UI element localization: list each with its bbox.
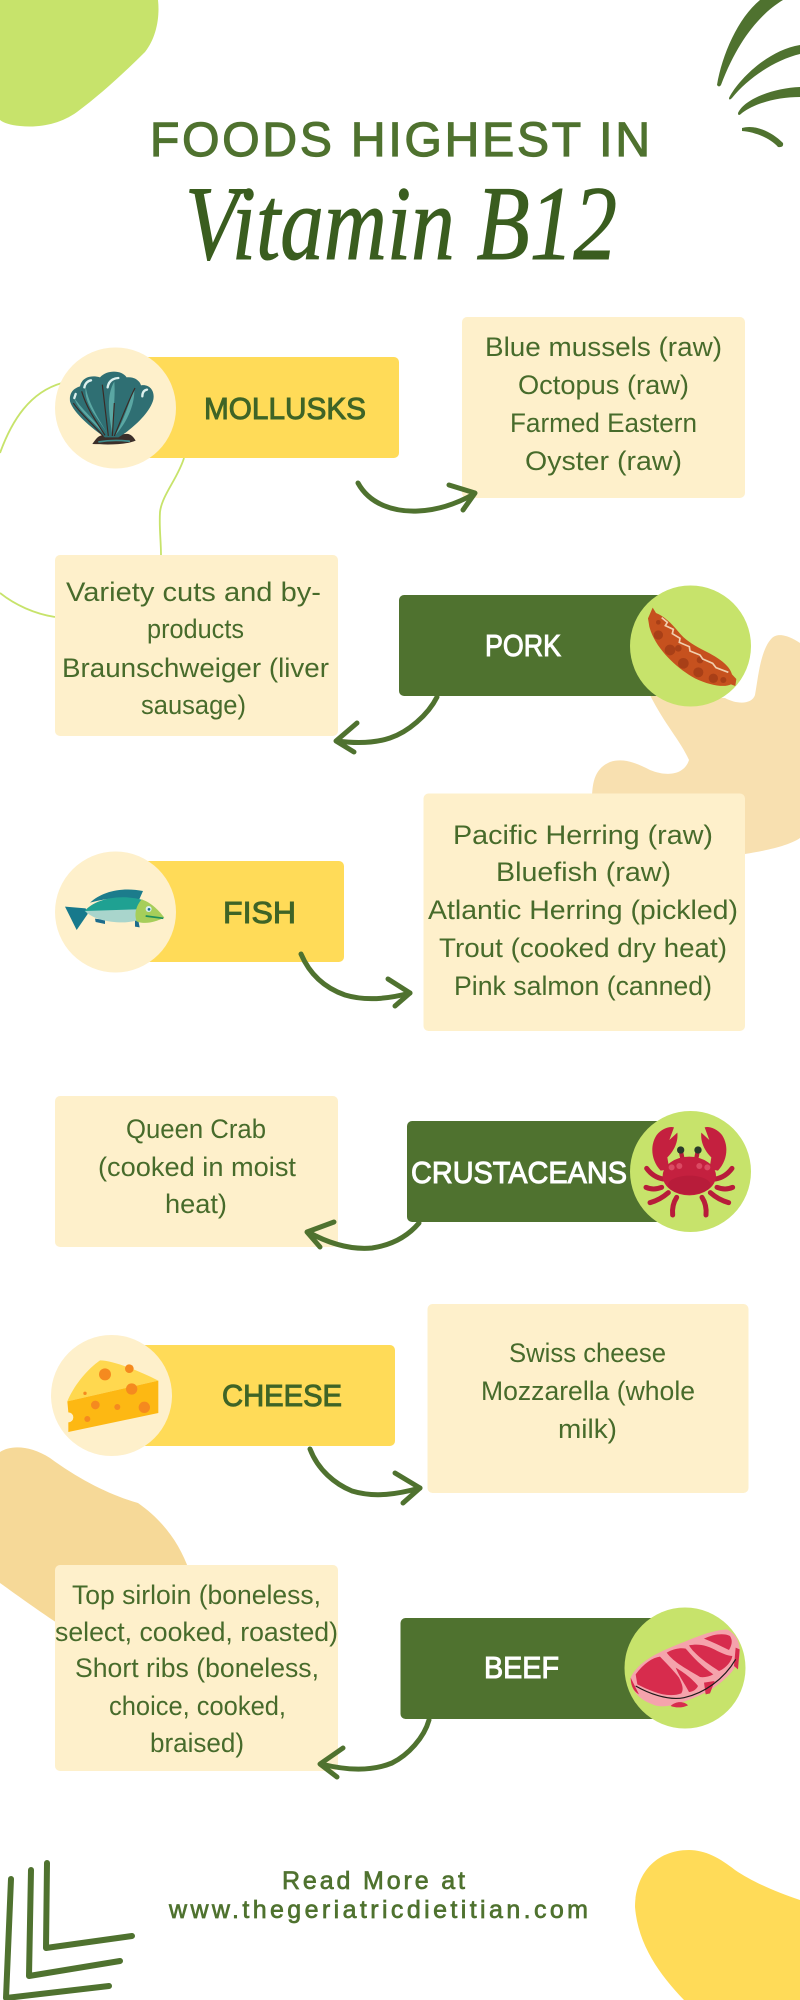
icon: shell — [70, 372, 154, 444]
panel: pork category — [399, 586, 751, 706]
panel: fish list: Atlantic Herring (pickled) — [428, 895, 738, 925]
cheese circle — [51, 1335, 172, 1456]
panel: fish list — [424, 794, 745, 1031]
icon: cheese — [67, 1360, 158, 1432]
cheese bar — [125, 1345, 395, 1446]
title line: foods highest in: FOODS HIGHEST IN — [150, 114, 650, 167]
panel: fish list: Trout (cooked dry heat) — [439, 933, 727, 963]
pork label: PORK — [485, 628, 561, 663]
arrow: pork to list — [336, 697, 437, 752]
decorative lines: bottom left — [6, 1863, 132, 1998]
footer text: Read More at — [282, 1867, 465, 1895]
beef label: BEEF — [484, 1650, 559, 1685]
panel: mollusks list: Blue mussels (raw) — [485, 332, 722, 362]
panel: pork list: Variety cuts and by- — [66, 577, 321, 607]
panel: beef list: choice, cooked, — [109, 1691, 286, 1721]
panel: fish list: Pink salmon (canned) — [454, 971, 712, 1001]
icon: crab — [646, 1127, 733, 1215]
mollusks label: MOLLUSKS — [204, 391, 366, 426]
panel: cheese list — [428, 1304, 748, 1493]
panel: fish list: Bluefish (raw) — [496, 857, 671, 887]
decorative blob: yellow bottom right — [635, 1850, 800, 2000]
title — [150, 114, 650, 282]
decorative blob: tan left — [0, 1447, 189, 1640]
decorative blob: tan right — [592, 635, 800, 860]
footer text: www.thegeriatricdietitian.com — [168, 1896, 588, 1924]
mollusks bar — [130, 357, 399, 458]
pork bar — [399, 595, 669, 696]
fish bar — [130, 861, 344, 962]
title line: vitamin b12: Vitamin B12 — [185, 165, 617, 282]
fish label: FISH — [223, 895, 296, 930]
panel: beef list: Short ribs (boneless, — [75, 1653, 319, 1683]
panel: crustaceans category — [407, 1111, 751, 1232]
panel: beef list: braised) — [150, 1728, 244, 1758]
panel: fish list: Pacific Herring (raw) — [453, 820, 713, 850]
panel: beef category — [400, 1608, 746, 1728]
panel: mollusks list: Octopus (raw) — [518, 370, 689, 400]
beef circle — [624, 1608, 746, 1728]
crustaceans bar — [407, 1121, 669, 1222]
panel: crustaceans list — [55, 1096, 338, 1247]
decorative blob: lime top left — [0, 0, 158, 126]
arrow: fish to list — [301, 954, 410, 1006]
icon: fish — [65, 889, 164, 930]
panel: pork list: products — [147, 614, 244, 644]
panel: beef list: Top sirloin (boneless, — [72, 1580, 321, 1610]
arrow: beef to list — [320, 1720, 429, 1777]
cheese label: CHEESE — [222, 1378, 342, 1413]
decorative leaves: top right — [717, 0, 800, 147]
arrow: crustaceans to list — [307, 1222, 419, 1248]
beef bar — [400, 1618, 664, 1719]
panel: crustaceans list: (cooked in moist — [98, 1152, 296, 1182]
arrow: cheese to list — [310, 1449, 420, 1503]
panel: cheese list: Mozzarella (whole — [481, 1376, 695, 1406]
panel: mollusks list — [462, 317, 745, 498]
pork circle — [630, 586, 751, 706]
panel: crustaceans list: Queen Crab — [126, 1114, 266, 1144]
panel: crustaceans list: heat) — [165, 1189, 227, 1219]
crustaceans label: CRUSTACEANS — [411, 1155, 627, 1190]
panel: mollusks list: Farmed Eastern — [510, 408, 697, 438]
panel: beef list — [55, 1565, 338, 1771]
crustaceans circle — [630, 1111, 751, 1232]
panel: cheese list: milk) — [558, 1414, 617, 1444]
panel: cheese category — [51, 1335, 395, 1456]
mollusks circle — [55, 348, 176, 468]
arrow: mollusks to list — [358, 483, 475, 511]
panel: fish category — [55, 852, 344, 972]
panel: pork list — [55, 555, 338, 736]
decorative thin lines — [0, 383, 184, 617]
icon: sausage — [648, 608, 736, 686]
icon: steak — [631, 1629, 740, 1707]
panel: mollusks list: Oyster (raw) — [525, 446, 682, 476]
panel: mollusks category — [55, 348, 399, 468]
fish circle — [55, 852, 176, 972]
panel: pork list: sausage) — [141, 690, 246, 720]
panel: beef list: select, cooked, roasted) — [55, 1617, 338, 1647]
footer text — [168, 1867, 588, 1924]
panel: cheese list: Swiss cheese — [509, 1338, 666, 1368]
panel: pork list: Braunschweiger (liver — [62, 653, 329, 683]
